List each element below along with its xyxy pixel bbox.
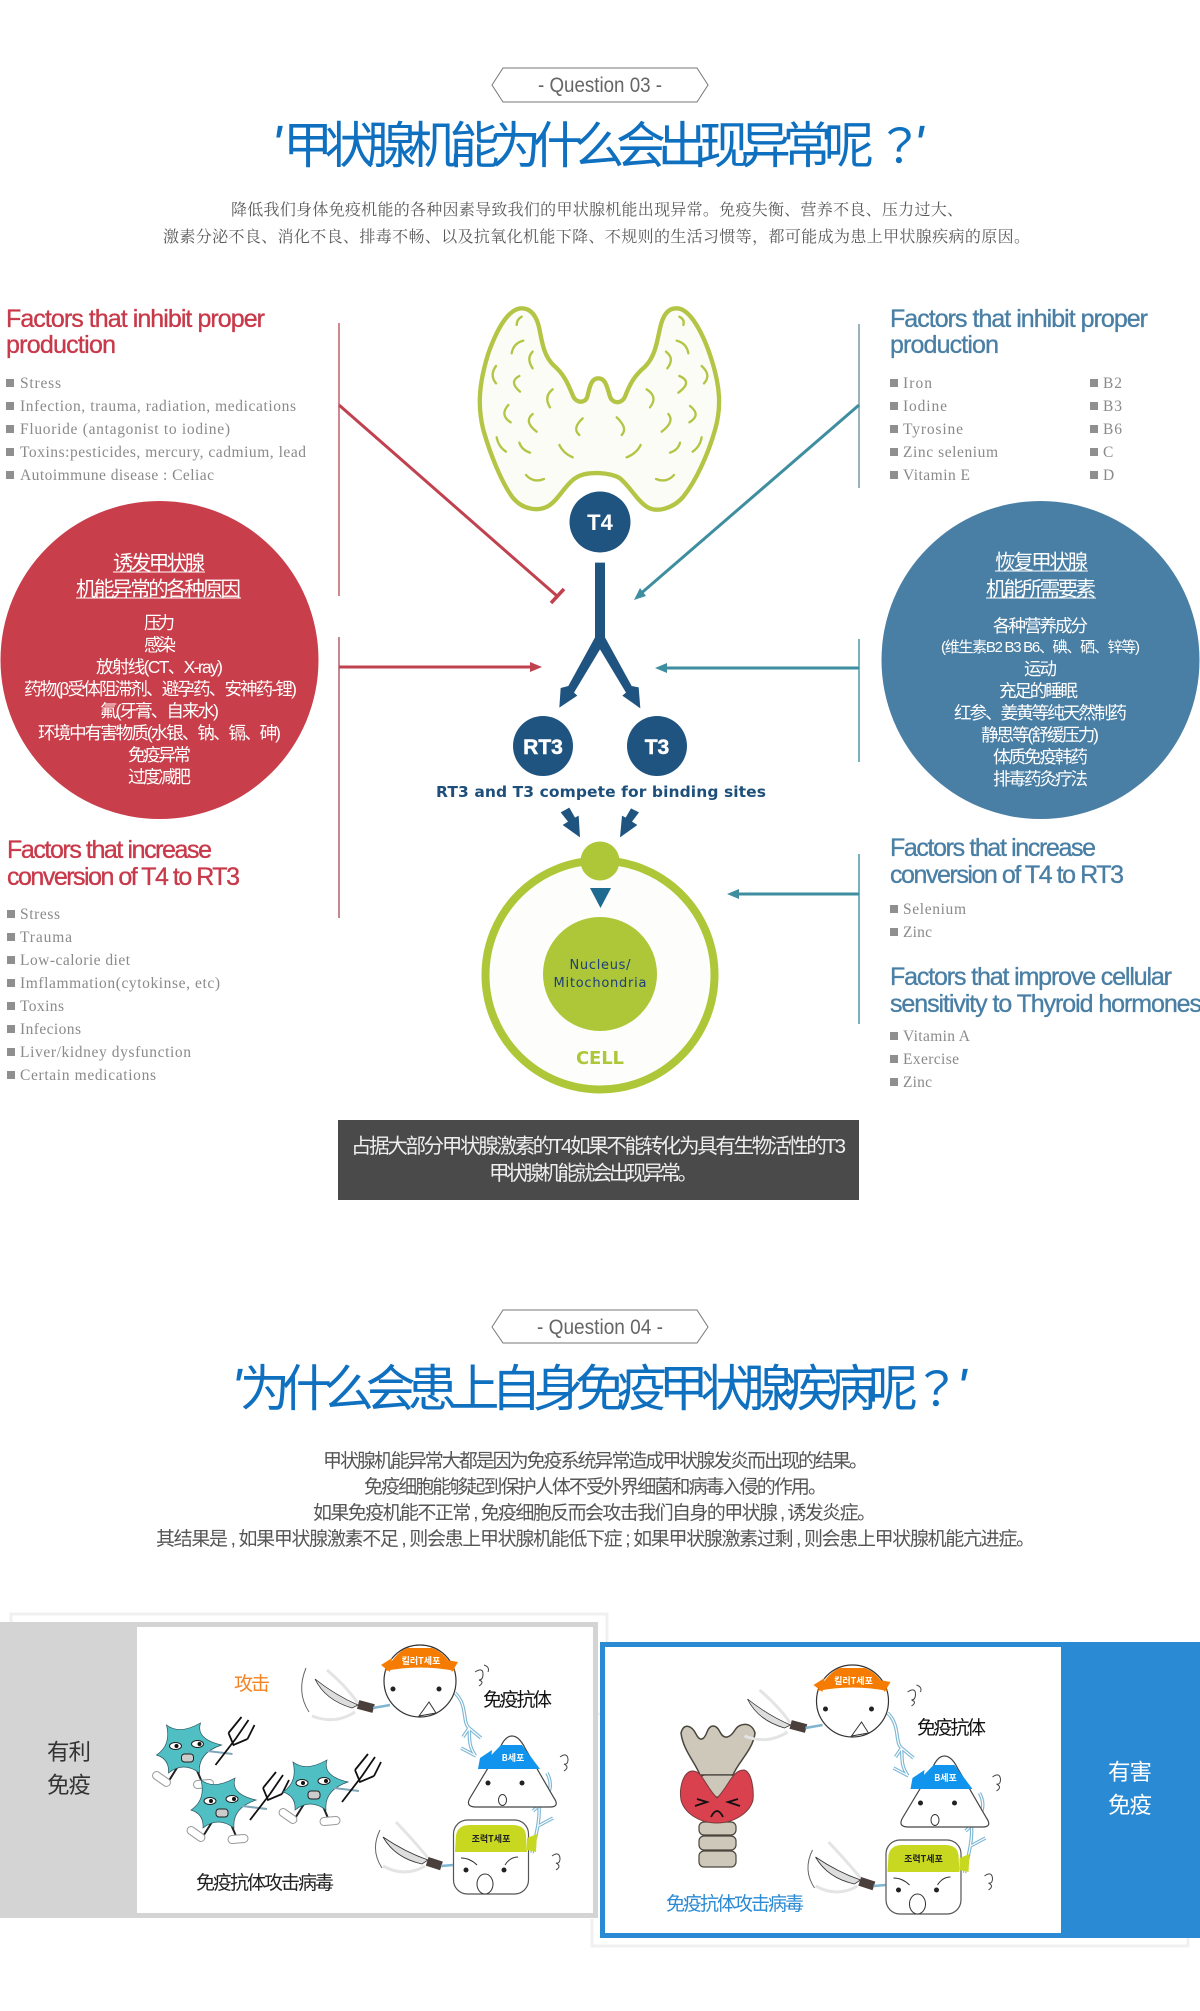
circle: elements to restore thyroid function: 静思等(舒缓压力) xyxy=(981,725,1099,745)
circle: elements to restore thyroid function: 排毒药灸疗法 xyxy=(993,769,1088,789)
panel: increase conversion (red): Certain medications xyxy=(20,1067,156,1084)
panel: beneficial immunity: 免疫 xyxy=(47,1773,91,1798)
illustration: immune cells (left): 킬러T세포 xyxy=(402,1654,440,1667)
caption: RT3 and T3 compete: RT3 and T3 compete for binding sites xyxy=(436,783,766,801)
panel: inhibit production (red): Autoimmune disease : Celiac xyxy=(20,467,214,484)
circle: elements to restore thyroid function: (维生素B2 B3 B6、碘、硒、锌等) xyxy=(941,638,1140,656)
icon: T3 node: T3 xyxy=(645,736,669,759)
panel: inhibit production (red): Stress xyxy=(20,375,61,392)
title: question 03: ' xyxy=(271,115,283,175)
circle: causes of thyroid dysfunction: 氟(牙膏、自来水) xyxy=(100,701,219,721)
panel: harmful immunity: 免疫 xyxy=(1108,1793,1152,1818)
title: question 03: ？ xyxy=(876,108,923,177)
icon: virus 1 xyxy=(151,1717,254,1789)
panel: improve cellular sensitivity: Vitamin A xyxy=(903,1028,971,1045)
panel: beneficial immunity: 免疫抗体 xyxy=(483,1689,552,1711)
circle: causes of thyroid dysfunction: 药物(β受体阻滞剂、避孕药、安神药-锂) xyxy=(24,679,297,699)
illustration: immune cells (left): B세포 xyxy=(502,1751,524,1764)
panel: increase conversion (blue) xyxy=(890,834,1124,941)
intro text: question 04: 其结果是 , 如果甲状腺激素不足 , 则会患上甲状腺机能低下症 ; 如果甲状腺激素过剩 , 则会患上甲状腺机能亢进症。 xyxy=(156,1528,1035,1550)
title: question 04: ' xyxy=(231,1358,243,1418)
panel: improve cellular sensitivity: Exercise xyxy=(903,1051,959,1068)
panel: inhibit production (blue): Tyrosine xyxy=(903,421,963,438)
panel: harmful immunity: 免疫抗体攻击病毒 xyxy=(666,1893,804,1915)
panel: inhibit production (red): Factors that inhibit proper xyxy=(6,305,265,333)
illustration: immune cells (right): 킬러T세포 xyxy=(834,1674,873,1687)
panel: increase conversion (blue): Factors that increase xyxy=(890,834,1096,862)
badge: Question 04: - Question 04 - xyxy=(537,1316,663,1339)
callout: dark summary box xyxy=(338,1120,859,1200)
title: question 03: 甲状腺机能为什么会出现异常呢 xyxy=(283,118,874,174)
title: question 04: ？ xyxy=(913,1351,960,1420)
icon: inflamed thyroid and trachea xyxy=(680,1724,755,1867)
panel: harmful immunity: 免疫抗体 xyxy=(917,1717,986,1739)
panel: beneficial immunity: 免疫抗体攻击病毒 xyxy=(196,1872,334,1894)
diagram: cell with nucleus: CELL xyxy=(576,1048,624,1069)
icon: RT3 node xyxy=(513,716,573,776)
panel: inhibit production (blue): B3 xyxy=(1103,398,1122,415)
icon: RT3 node: RT3 xyxy=(523,736,563,759)
panel: inhibit production (blue): B2 xyxy=(1103,375,1122,392)
panel: inhibit production (blue): D xyxy=(1103,467,1114,484)
panel: increase conversion (red): Factors that increase xyxy=(7,836,212,864)
panel: inhibit production (blue): Zinc selenium xyxy=(903,444,998,461)
callout: dark summary box: 甲状腺机能就会出现异常。 xyxy=(489,1162,698,1185)
circle: causes of thyroid dysfunction: 放射线(CT、X-ray) xyxy=(96,657,223,677)
panel: inhibit production (blue): production xyxy=(890,331,999,359)
panel: inhibit production (blue): Iron xyxy=(903,375,932,392)
panel: harmful immunity xyxy=(592,1642,1200,1946)
intro text: question 04: 免疫细胞能够起到保护人体不受外界细菌和病毒入侵的作用。 xyxy=(364,1476,827,1498)
panel: inhibit production (red): production xyxy=(6,331,116,359)
title: question 03: ' xyxy=(913,115,925,175)
illustration: immune cells (right): 조력T세포 xyxy=(904,1852,943,1865)
intro text: question 03: 激素分泌不良、消化不良、排毒不畅、以及抗氧化机能下降、不规则的生活习惯等，都可能成为患上甲状腺疾病的原因。 xyxy=(163,228,1030,246)
intro text: question 03 xyxy=(163,200,1030,246)
badge: Question 03 xyxy=(492,68,708,102)
arrows: toward binding site xyxy=(561,808,639,837)
panel: increase conversion (red): conversion of T4 to RT3 xyxy=(7,863,240,891)
diagram: cell with nucleus: Mitochondria xyxy=(554,976,646,991)
circle: elements to restore thyroid function xyxy=(882,501,1200,819)
circle: causes of thyroid dysfunction: 感染 xyxy=(144,635,176,655)
panel: inhibit production (blue): Vitamin E xyxy=(903,467,970,484)
intro text: question 04: 甲状腺机能异常大都是因为免疫系统异常造成甲状腺发炎而出现的结果。 xyxy=(323,1450,868,1472)
circle: causes of thyroid dysfunction: 机能异常的各种原因 xyxy=(76,578,241,601)
circle: causes of thyroid dysfunction: 诱发甲状腺 xyxy=(113,552,205,575)
panel: inhibit production (red) xyxy=(6,305,306,484)
icon: T4 node xyxy=(570,492,630,552)
icon: virus 2 xyxy=(186,1772,289,1844)
panel: inhibit production (blue): Factors that inhibit proper xyxy=(890,305,1148,333)
panel: increase conversion (blue): Zinc xyxy=(903,924,932,941)
panel: increase conversion (blue): conversion of T4 to RT3 xyxy=(890,861,1124,889)
icon: T4 node: T4 xyxy=(587,510,614,535)
badge: Question 04 xyxy=(492,1310,708,1343)
title: question 04: ' xyxy=(956,1358,968,1418)
panel: inhibit production (red): Infection, trauma, radiation, medications xyxy=(20,398,296,415)
panel: beneficial immunity: 攻击 xyxy=(234,1673,270,1695)
panel: increase conversion (red): Toxins xyxy=(20,998,64,1015)
bracket lines and inhibit arrows xyxy=(339,323,859,1024)
panel: increase conversion (red): Trauma xyxy=(20,929,72,946)
illustration: immune cells (right): B세포 xyxy=(934,1771,957,1784)
icon: virus 3 xyxy=(278,1754,381,1826)
arrow: T4 splits to RT3 and T3 xyxy=(559,563,640,708)
icon: thyroid gland xyxy=(480,308,719,510)
panel: inhibit production (blue): B6 xyxy=(1103,421,1122,438)
panel: inhibit production (red): Toxins:pesticides, mercury, cadmium, lead xyxy=(20,444,306,461)
circle: elements to restore thyroid function: 红参、姜黄等纯天然制药 xyxy=(954,703,1127,723)
circle: causes of thyroid dysfunction: 免疫异常 xyxy=(128,745,191,765)
panel: increase conversion (red) xyxy=(7,836,240,1084)
panel: increase conversion (blue): Selenium xyxy=(903,901,966,918)
circle: causes of thyroid dysfunction: 压力 xyxy=(144,613,175,633)
badge: Question 03: - Question 03 - xyxy=(538,74,662,97)
panel: increase conversion (red): Imflammation(cytokinse, etc) xyxy=(20,975,220,992)
panel: inhibit production (blue): Iodine xyxy=(903,398,947,415)
circle: elements to restore thyroid function: 各种营养成分 xyxy=(993,616,1088,636)
circle: elements to restore thyroid function: 充足的睡眠 xyxy=(999,681,1078,701)
circle: elements to restore thyroid function: 恢复甲状腺 xyxy=(995,551,1088,574)
callout: dark summary box: 占据大部分甲状腺激素的T4如果不能转化为具有生物活性的T3 xyxy=(351,1135,846,1158)
panel: harmful immunity: 有害 xyxy=(1108,1760,1152,1785)
panel: increase conversion (red): Stress xyxy=(20,906,60,923)
diagram: cell with nucleus xyxy=(486,842,714,1090)
circle: elements to restore thyroid function: 运动 xyxy=(1024,659,1057,679)
circle: causes of thyroid dysfunction: 环境中有害物质(水银、钠、镉、砷) xyxy=(38,723,281,743)
panel: improve cellular sensitivity xyxy=(890,963,1200,1091)
diagram: cell with nucleus: Nucleus/ xyxy=(570,958,631,973)
panel: inhibit production (red): Fluoride (antagonist to iodine) xyxy=(20,421,230,438)
circle: elements to restore thyroid function: 体质免疫韩药 xyxy=(993,747,1088,767)
title: question 04: 为什么会患上自身免疫甲状腺疾病呢 xyxy=(240,1361,918,1417)
illustration: immune cells (left) xyxy=(302,1645,568,1894)
panel: increase conversion (red): Low-calorie diet xyxy=(20,952,131,969)
panel: beneficial immunity: 有利 xyxy=(47,1740,91,1765)
circle: elements to restore thyroid function: 机能所需要素 xyxy=(986,578,1096,601)
panel: inhibit production (blue) xyxy=(890,305,1148,484)
panel: increase conversion (red): Liver/kidney dysfunction xyxy=(20,1044,191,1061)
illustration: immune cells (right) xyxy=(744,1665,1000,1914)
icon: T3 node xyxy=(627,716,687,776)
circle: causes of thyroid dysfunction: 过度减肥 xyxy=(128,767,191,787)
panel: improve cellular sensitivity: sensitivity to Thyroid hormones xyxy=(890,990,1200,1018)
illustration: immune cells (left): 조력T세포 xyxy=(472,1832,510,1845)
panel: beneficial immunity xyxy=(0,1614,607,1918)
panel: improve cellular sensitivity: Zinc xyxy=(903,1074,932,1091)
circle: causes of thyroid dysfunction xyxy=(0,501,318,819)
panel: inhibit production (blue): C xyxy=(1103,444,1113,461)
panel: improve cellular sensitivity: Factors that improve cellular xyxy=(890,963,1172,991)
intro text: question 03: 降低我们身体免疫机能的各种因素导致我们的甲状腺机能出现异常。免疫失衡、营养不良、压力过大、 xyxy=(231,200,963,219)
intro text: question 04: 如果免疫机能不正常 , 免疫细胞反而会攻击我们自身的甲状腺 , 诱发炎症。 xyxy=(313,1502,876,1524)
panel: increase conversion (red): Infecions xyxy=(20,1021,81,1038)
intro text: question 04 xyxy=(156,1450,1035,1550)
